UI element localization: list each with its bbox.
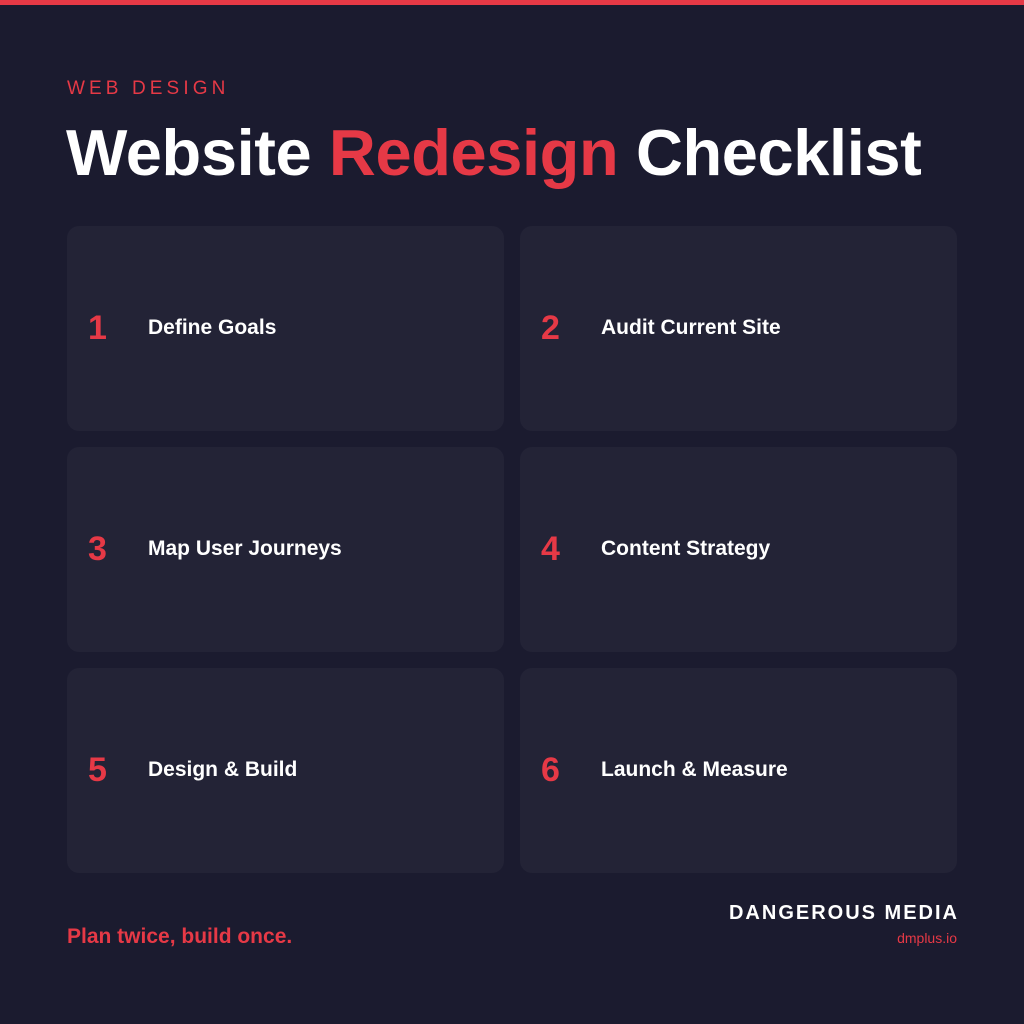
card 1: [67, 226, 504, 431]
card 1: Define Goals: [148, 316, 276, 339]
card 4: Content Strategy: [601, 537, 770, 560]
card 5: [67, 668, 504, 873]
card 4: 4: [541, 530, 560, 568]
card 6: 6: [541, 751, 560, 789]
card 4: [520, 447, 957, 652]
title: Website Redesign Checklist: [66, 116, 921, 189]
card 2: 2: [541, 309, 560, 347]
tagline: Plan twice, build once.: [67, 925, 292, 948]
card 5: 5: [88, 751, 107, 789]
top accent bar: [0, 0, 1024, 5]
brand block: [729, 902, 959, 946]
card 3: Map User Journeys: [148, 537, 342, 560]
card 3: 3: [88, 530, 107, 568]
card 6: [520, 668, 957, 873]
card 5: Design & Build: [148, 758, 297, 781]
card 2: [520, 226, 957, 431]
eyebrow label: WEB DESIGN: [67, 78, 229, 99]
card 2: Audit Current Site: [601, 316, 781, 339]
card 3: [67, 447, 504, 652]
card 6: Launch & Measure: [601, 758, 788, 781]
card 1: 1: [88, 309, 107, 347]
brand block: dmplus.io: [897, 930, 957, 946]
brand block: DANGEROUS MEDIA: [729, 902, 959, 924]
